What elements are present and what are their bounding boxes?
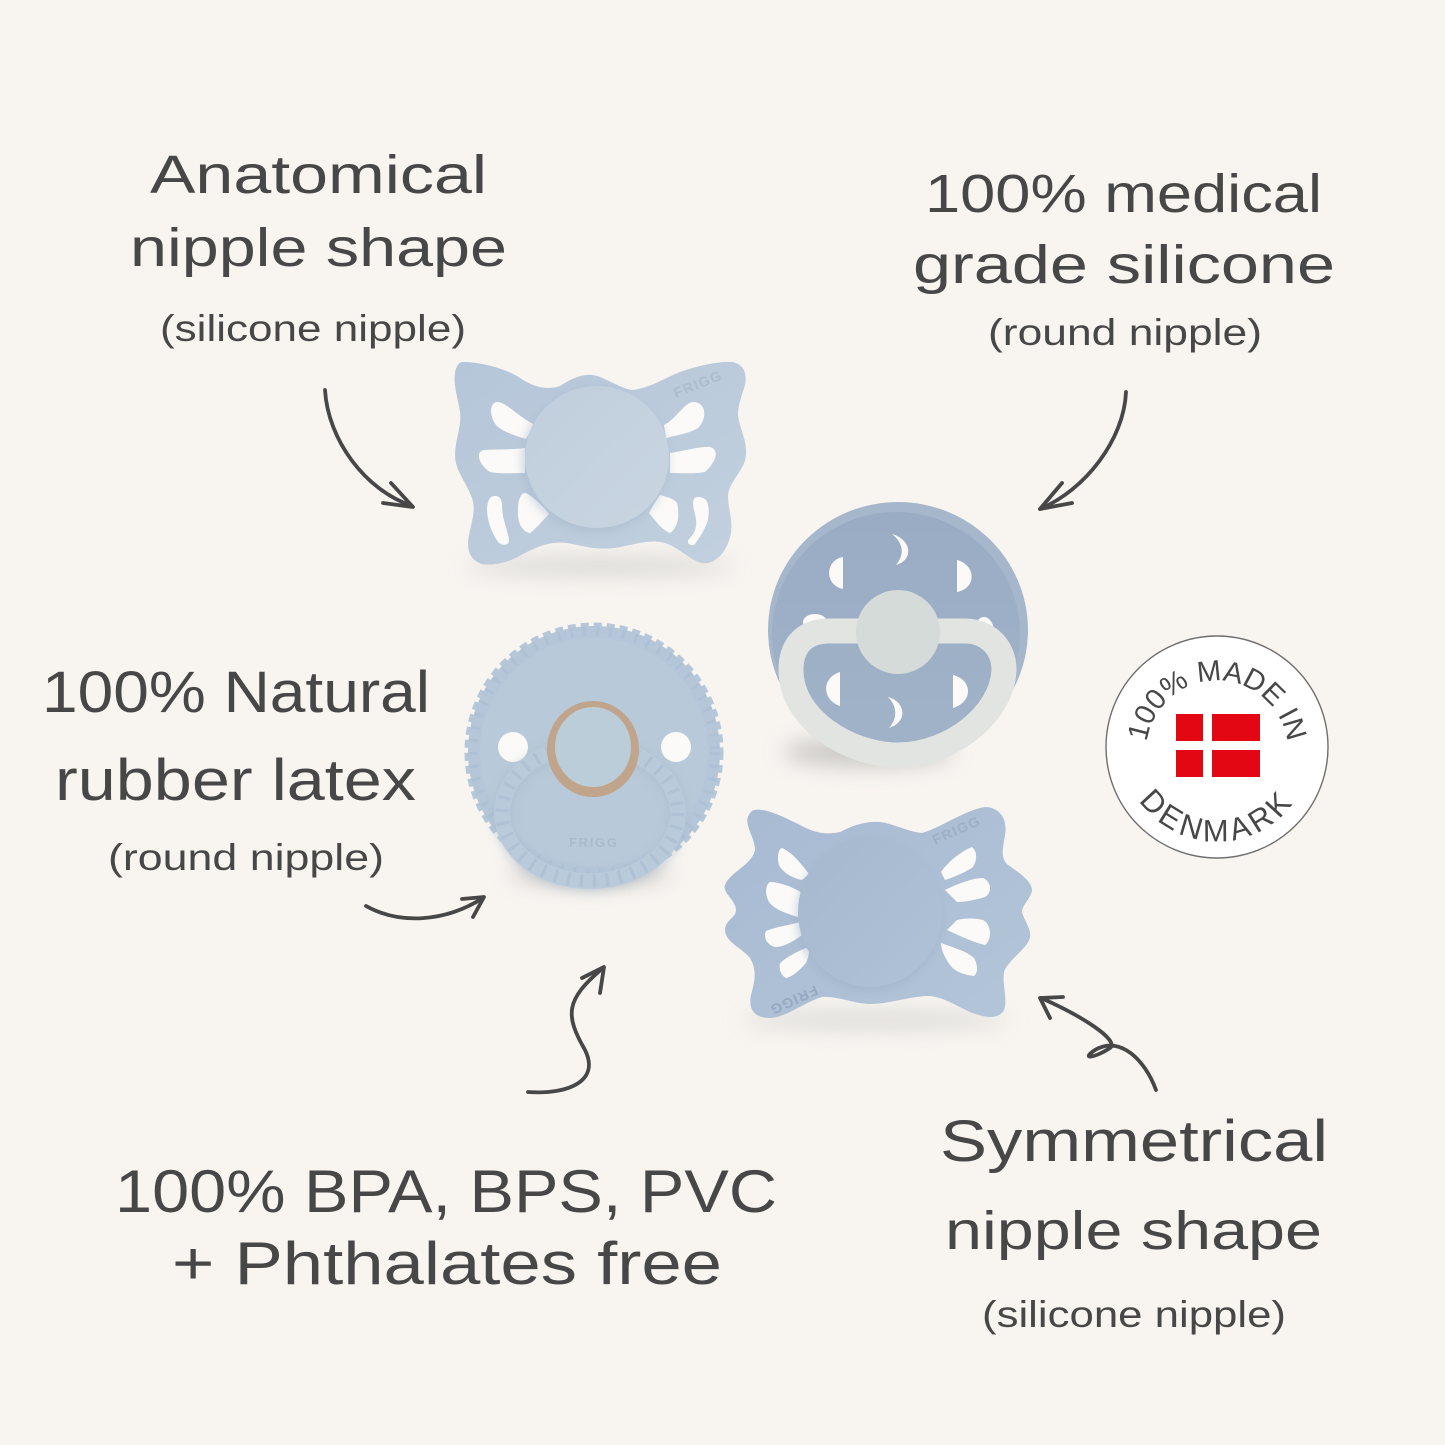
text: symmetrical nipple shape xyxy=(940,1109,1328,1335)
text: natural rubber latex: (round nipple) xyxy=(108,837,384,878)
badge text bottom: DENMARK xyxy=(1140,788,1293,842)
rope rim xyxy=(467,625,721,879)
icon: Danish flag xyxy=(1176,714,1260,777)
moon holes xyxy=(803,534,994,728)
text: medical grade silicone: (round nipple) xyxy=(988,312,1262,353)
text: symmetrical nipple shape: (silicone nipple) xyxy=(982,1294,1286,1335)
arrow: to butterfly pacifier xyxy=(325,390,413,507)
arrow: loop to symmetrical pacifier xyxy=(1040,997,1156,1090)
badge text top: 100% MADE IN xyxy=(1128,660,1307,740)
badge: made in Denmark xyxy=(1105,635,1329,859)
nipple xyxy=(856,590,940,674)
brand marks: FRIGG xyxy=(930,813,982,848)
nipple xyxy=(555,707,631,787)
text: anatomical nipple shape: (silicone nipple) xyxy=(160,308,466,349)
nipple xyxy=(797,837,942,991)
text: natural rubber latex xyxy=(42,660,430,878)
finger holes xyxy=(765,847,990,978)
brand mark: FRIGG xyxy=(671,367,724,401)
text: symmetrical nipple shape: nipple shape xyxy=(945,1201,1322,1261)
text: BPA free: + Phthalates free xyxy=(172,1230,722,1297)
text: natural rubber latex: rubber latex xyxy=(55,748,416,813)
arrow: to moon pacifier xyxy=(1040,392,1126,509)
text: medical grade silicone: 100% medical xyxy=(925,164,1322,224)
finger holes xyxy=(479,402,716,545)
vent holes xyxy=(498,732,691,762)
pacifier: butterfly xyxy=(455,362,746,576)
text: anatomical nipple shape xyxy=(130,145,507,349)
text: BPA free: 100% BPA, BPS, PVC xyxy=(115,1158,777,1225)
arrow: squiggle to rope pacifier xyxy=(528,967,604,1092)
text: natural rubber latex: 100% Natural xyxy=(42,660,430,725)
text: medical grade silicone: grade silicone xyxy=(913,235,1335,295)
nipple base xyxy=(547,701,639,797)
glow ring xyxy=(791,631,1004,755)
arrow: to rope pacifier xyxy=(366,897,484,918)
text: medical grade silicone xyxy=(913,164,1335,353)
pacifier: moon xyxy=(768,502,1028,766)
text: BPA free xyxy=(115,1158,777,1297)
pacifier: symmetrical xyxy=(725,807,1032,1030)
text: symmetrical nipple shape: Symmetrical xyxy=(940,1109,1328,1174)
pacifier: rope xyxy=(467,625,721,886)
nipple xyxy=(522,386,669,533)
brand marks: FRIGG xyxy=(768,982,820,1018)
brand mark: FRIGG xyxy=(569,835,617,850)
rope ring xyxy=(502,745,678,883)
text: anatomical nipple shape: Anatomical xyxy=(150,145,487,205)
text: anatomical nipple shape: nipple shape xyxy=(130,218,507,278)
brand marks xyxy=(768,813,982,1018)
